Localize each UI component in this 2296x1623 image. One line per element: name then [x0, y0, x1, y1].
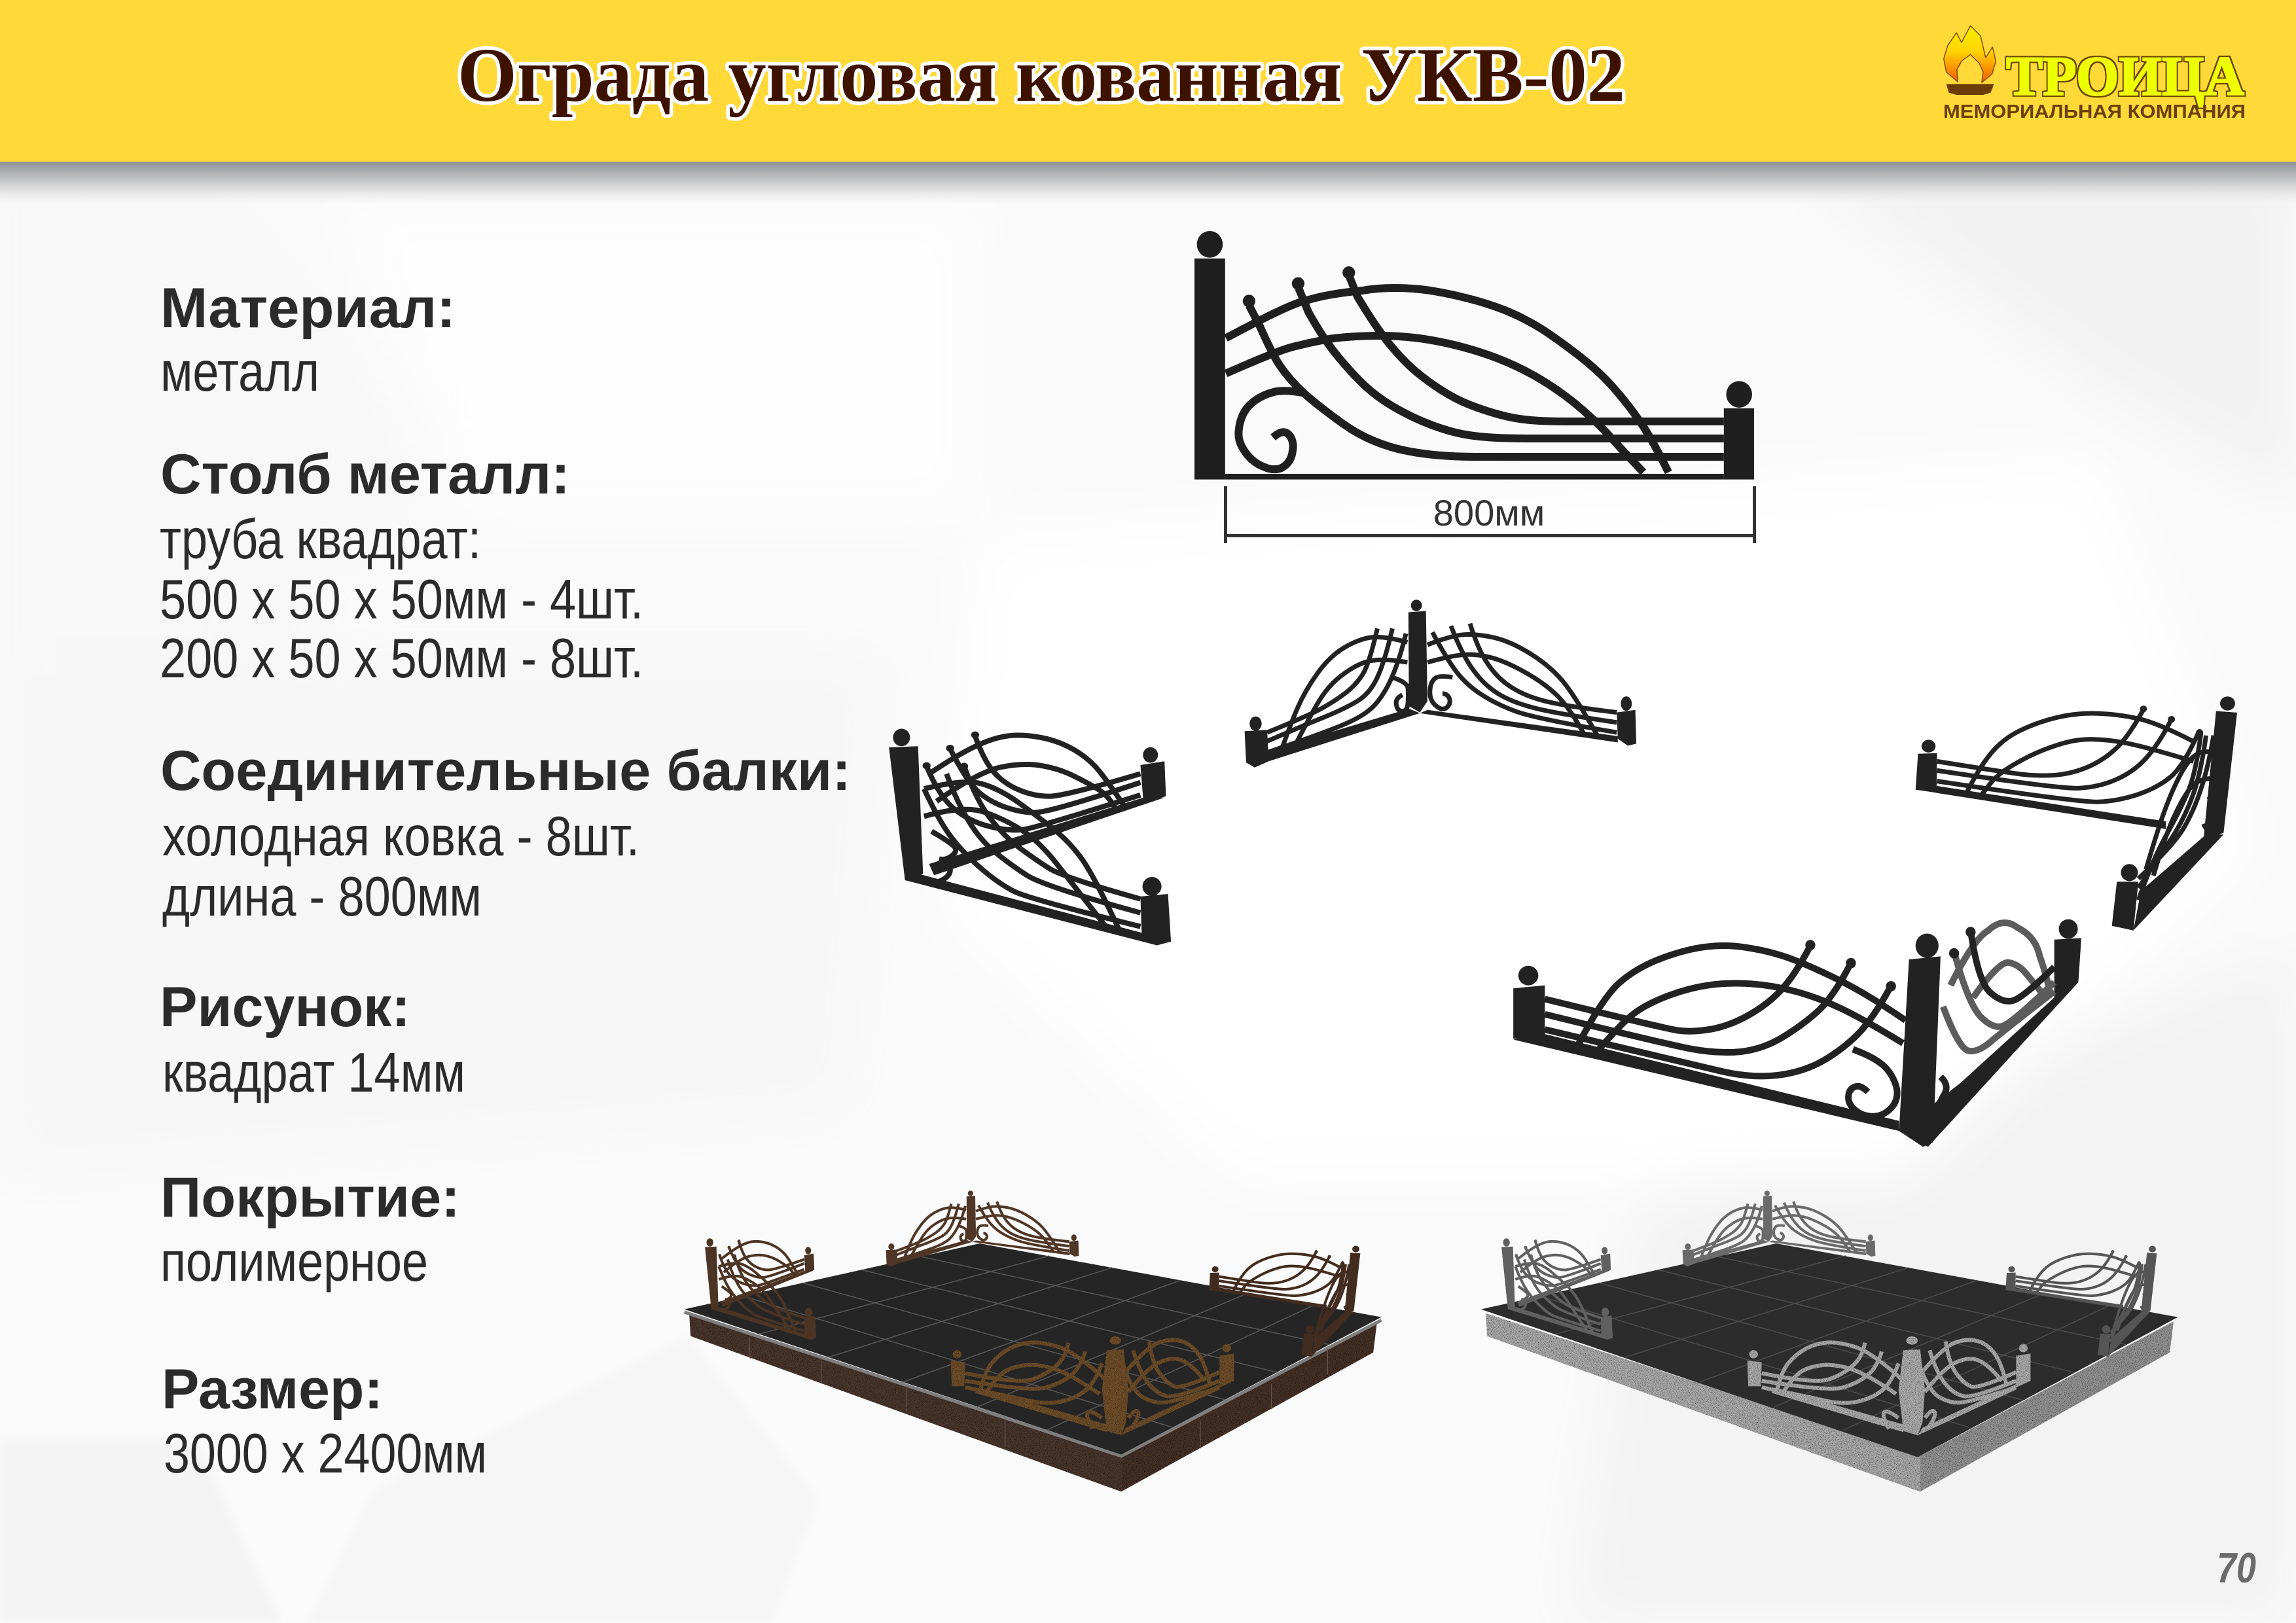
brown base and slab	[685, 1243, 1382, 1491]
logo wordmark: ТРОИЦА	[2006, 45, 2244, 107]
fence: front corner set	[1513, 919, 2081, 1147]
fence: right corner set	[1916, 696, 2237, 931]
heading: size: Размер:	[162, 1358, 383, 1421]
text: post details: труба квадрат:	[160, 508, 481, 571]
text: post details: 200 х 50 х 50мм - 8шт.	[160, 628, 643, 690]
heading: material: Материал:	[160, 277, 456, 340]
silver fence: front	[1748, 1336, 2030, 1435]
heading: pattern: Рисунок:	[160, 976, 410, 1039]
brown fence: left	[705, 1238, 816, 1340]
brown fence: right	[1209, 1245, 1360, 1357]
grey base and slab	[1481, 1243, 2178, 1491]
text: metal: металл	[160, 341, 319, 403]
dimension: 800 mm	[1224, 486, 1756, 543]
heading: coating: Покрытие:	[160, 1166, 460, 1229]
dimension: 800 mm: 800мм	[1433, 492, 1545, 533]
page number: 70	[2217, 1544, 2256, 1592]
header band	[0, 0, 2296, 162]
text: post details	[160, 508, 643, 690]
icon: flame and bowl	[1944, 26, 1996, 95]
header shadow	[0, 162, 2296, 205]
text: beam details: длина - 800мм	[162, 866, 482, 928]
text: coating details: полимерное	[160, 1231, 428, 1293]
fence elevation drawing	[1194, 231, 1754, 480]
silver fence: left	[1501, 1238, 1613, 1340]
brown fence: front	[951, 1336, 1234, 1435]
text: pattern details: квадрат 14мм	[162, 1042, 465, 1104]
silver fence: right	[2005, 1245, 2157, 1357]
title: Ограда угловая кованная УКВ-02	[457, 32, 1625, 118]
logo	[1943, 26, 2246, 122]
monument: brown version	[685, 1190, 1382, 1491]
text: beam details: холодная ковка - 8шт.	[162, 806, 639, 868]
logo tagline: МЕМОРИАЛЬНАЯ КОМПАНИЯ	[1943, 101, 2246, 122]
silver fence: top	[1683, 1190, 1875, 1266]
heading: beams: Соединительные балки:	[160, 740, 851, 802]
fence: top corner set	[1245, 599, 1636, 768]
text: beam details	[162, 806, 639, 928]
heading: post: Столб металл:	[160, 443, 570, 506]
text: post details: 500 х 50 х 50мм - 4шт.	[160, 569, 643, 631]
monument: silver version	[1481, 1190, 2178, 1491]
text: size details: 3000 х 2400мм	[164, 1423, 487, 1485]
fence: left corner set	[889, 728, 1171, 945]
spec list	[160, 277, 851, 1485]
brown fence: top	[886, 1190, 1079, 1266]
